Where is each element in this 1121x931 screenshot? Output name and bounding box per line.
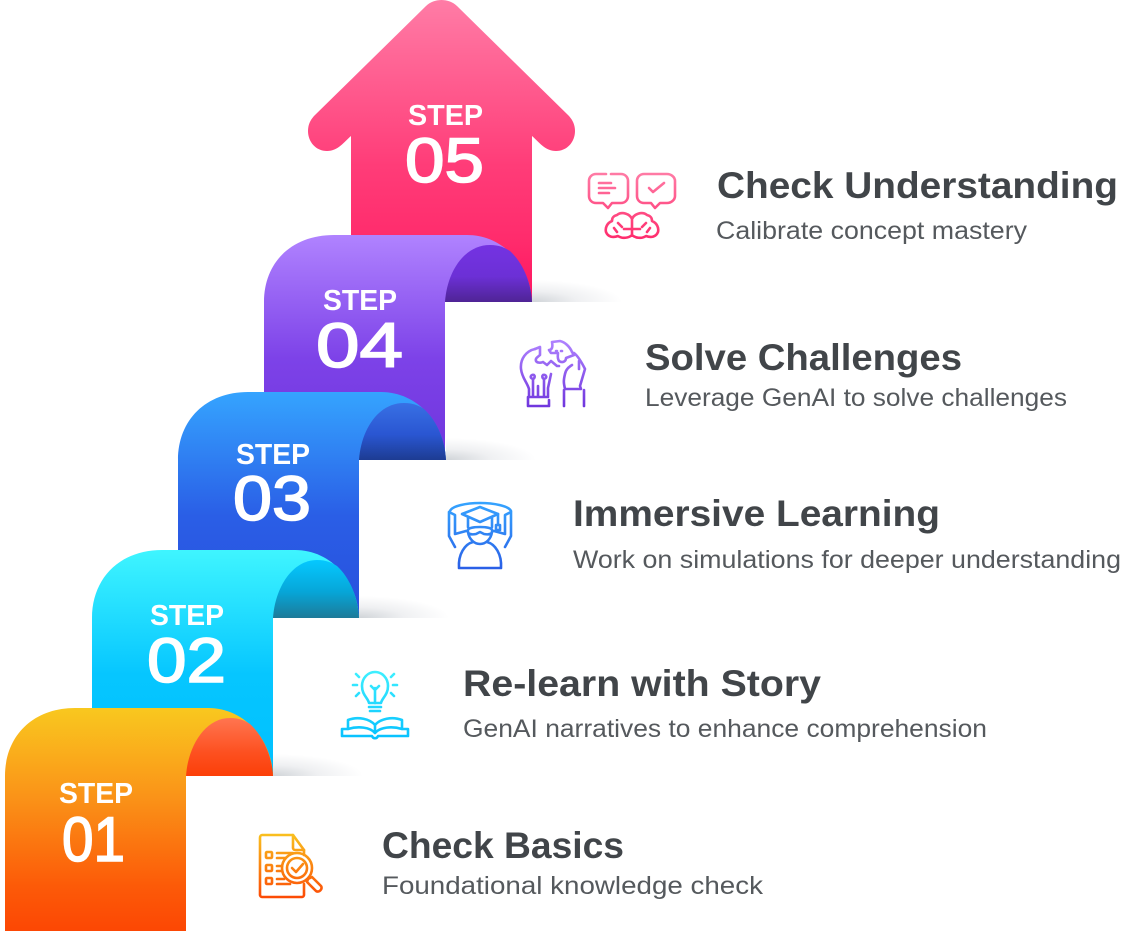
heading: Check Understanding: Check Understanding xyxy=(717,165,1118,206)
step 05 label: STEP xyxy=(408,100,483,132)
heading: Re-learn with Story: Re-learn with Story xyxy=(463,663,821,704)
step 02 number: 02 xyxy=(147,626,226,696)
icon: speech bubbles and brain xyxy=(589,174,675,238)
step 01 number: 01 xyxy=(62,805,125,875)
text: Calibrate concept mastery: Calibrate concept mastery xyxy=(716,217,1028,245)
text: Leverage GenAI to solve challenges: Leverage GenAI to solve challenges xyxy=(645,384,1067,412)
ribbon fold xyxy=(359,403,446,460)
ribbon fold xyxy=(186,718,273,776)
icon: checklist with magnifier xyxy=(260,835,322,897)
heading: Immersive Learning: Immersive Learning xyxy=(573,493,940,534)
panel: step 02 ribbon xyxy=(92,550,363,776)
heading: Check Basics: Check Basics xyxy=(382,825,624,866)
ribbon front xyxy=(5,708,273,931)
heading: Solve Challenges: Solve Challenges xyxy=(645,337,962,378)
ribbon fold xyxy=(273,560,359,618)
icon: graduate in VR ring xyxy=(449,503,511,568)
arrow shape xyxy=(308,0,575,302)
icon: light bulb over open book xyxy=(342,672,408,738)
ribbon fold xyxy=(445,245,532,302)
step 03 label: STEP xyxy=(236,439,310,471)
ribbon front xyxy=(264,235,532,460)
panel: step 05 arrow xyxy=(308,0,622,302)
step 03 number: 03 xyxy=(233,464,311,534)
step 02 label: STEP xyxy=(150,600,224,632)
icon: bulb puzzle and hand xyxy=(521,341,585,406)
panel: step 03 ribbon xyxy=(178,392,449,618)
panel: step 04 ribbon xyxy=(264,235,536,460)
ribbon front xyxy=(178,392,446,618)
step 05 number: 05 xyxy=(405,126,484,196)
step 04 number: 04 xyxy=(316,311,403,381)
step 04 label: STEP xyxy=(323,285,397,317)
text: GenAI narratives to enhance comprehension: GenAI narratives to enhance comprehension xyxy=(463,715,987,743)
panel: step 01 ribbon xyxy=(5,708,273,931)
ribbon front xyxy=(92,550,359,776)
text: Work on simulations for deeper understanding: Work on simulations for deeper understanding xyxy=(573,546,1121,574)
text: Foundational knowledge check: Foundational knowledge check xyxy=(382,872,764,900)
step 01 label: STEP xyxy=(59,778,133,810)
